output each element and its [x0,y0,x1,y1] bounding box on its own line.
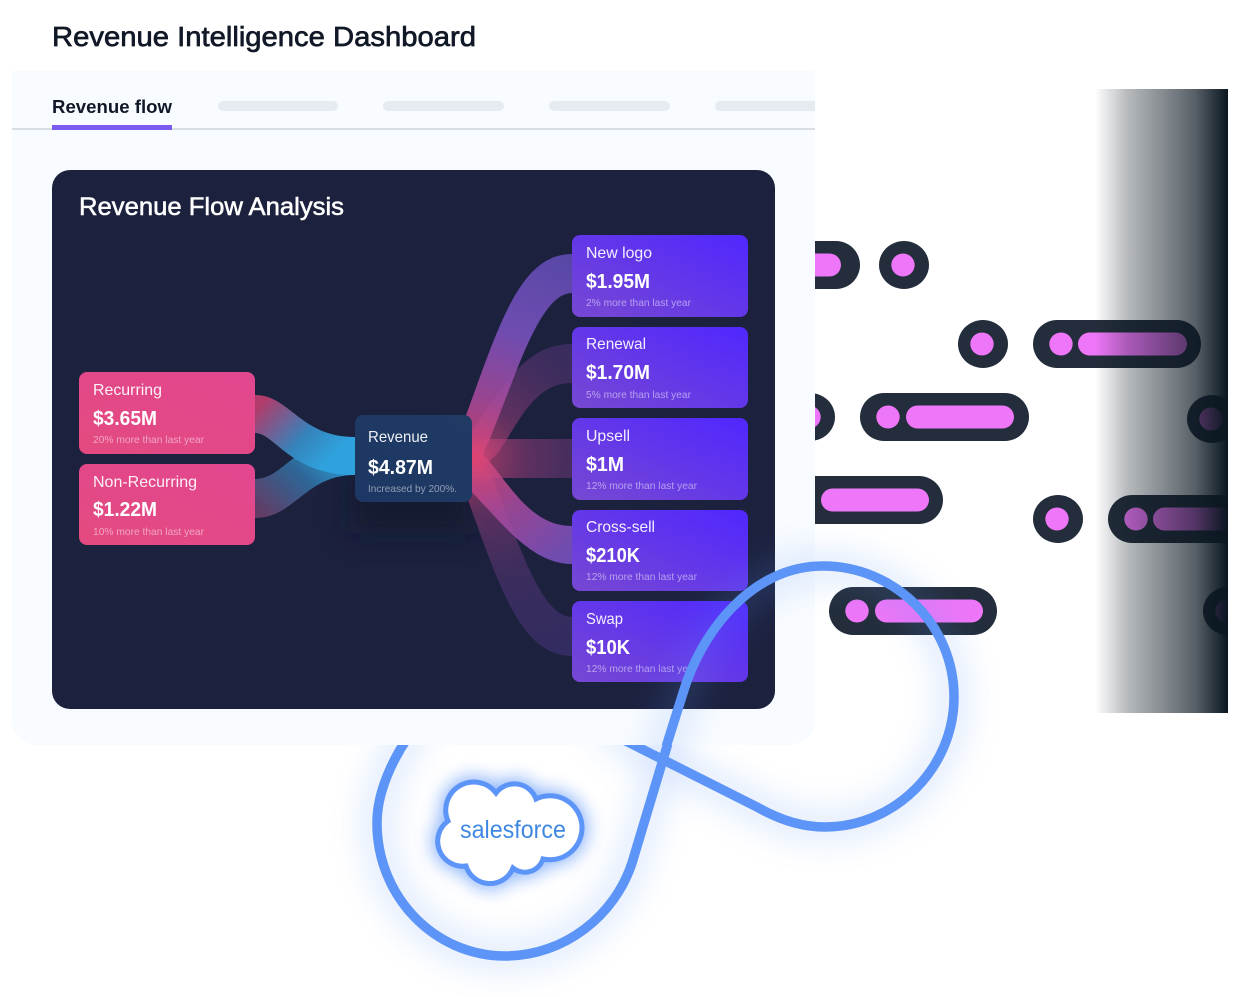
sankey flows: sources to revenue [255,395,355,518]
tab: revenue flow: Revenue flow [52,97,173,117]
node: non-recurring: 10% more than last year [93,526,204,538]
node: cross-sell [572,510,748,591]
node: swap: $10K [586,637,631,659]
revenue card shadow [350,465,475,533]
pill row 5 [829,587,1240,635]
pill row 2 [958,320,1201,368]
title: Revenue Intelligence Dashboard [52,21,476,52]
node: upsell [572,418,748,500]
dashboard card [12,71,815,745]
node: non-recurring: $1.22M [93,499,157,521]
node: renewal: $1.70M [586,362,650,384]
dark gradient fade band [1095,89,1228,713]
node: cross-sell: Cross-sell [586,519,655,536]
salesforce wordmark: salesforce [460,816,566,844]
node: revenue: Revenue [368,429,428,446]
node: revenue [355,415,472,502]
node: recurring: $3.65M [93,408,157,430]
node: recurring: 20% more than last year [93,434,204,446]
node: non-recurring [79,464,255,545]
pill row 1 [815,241,929,289]
salesforce cloud logo [438,782,582,884]
node: recurring: Recurring [93,382,162,399]
node: swap: Swap [586,611,623,628]
node: upsell: Upsell [586,428,630,445]
node: upsell: 12% more than last year [586,480,697,492]
node: cross-sell: $210K [586,545,641,567]
node: new logo: New logo [586,245,652,262]
integration loop behind the card [377,566,954,956]
node: upsell: $1M [586,454,624,476]
node: swap [572,601,748,682]
node: recurring [79,372,255,454]
panel heading: Revenue Flow Analysis [79,193,344,221]
node: new logo [572,235,748,317]
node: non-recurring: Non-Recurring [93,474,197,491]
node: cross-sell: 12% more than last year [586,571,697,583]
placeholder tabs [218,101,815,111]
sankey flows: revenue to destinations [455,254,572,656]
node: new logo: 2% more than last year [586,297,691,309]
node: renewal: Renewal [586,336,646,353]
node: renewal: 5% more than last year [586,389,691,401]
node: revenue: Increased by 200%. [368,483,457,495]
pill row 4 [815,476,1224,543]
node: swap: 12% more than last year [586,663,697,675]
active tab underline [52,125,172,130]
tab bar divider [12,128,815,130]
decorative data pills with fading edge [815,241,1224,635]
node: renewal [572,327,748,408]
integration loop over the card [642,543,815,745]
node: new logo: $1.95M [586,271,650,293]
node: revenue: $4.87M [368,457,433,479]
panel: revenue flow analysis [52,170,775,709]
pill row 3 [785,393,1237,443]
